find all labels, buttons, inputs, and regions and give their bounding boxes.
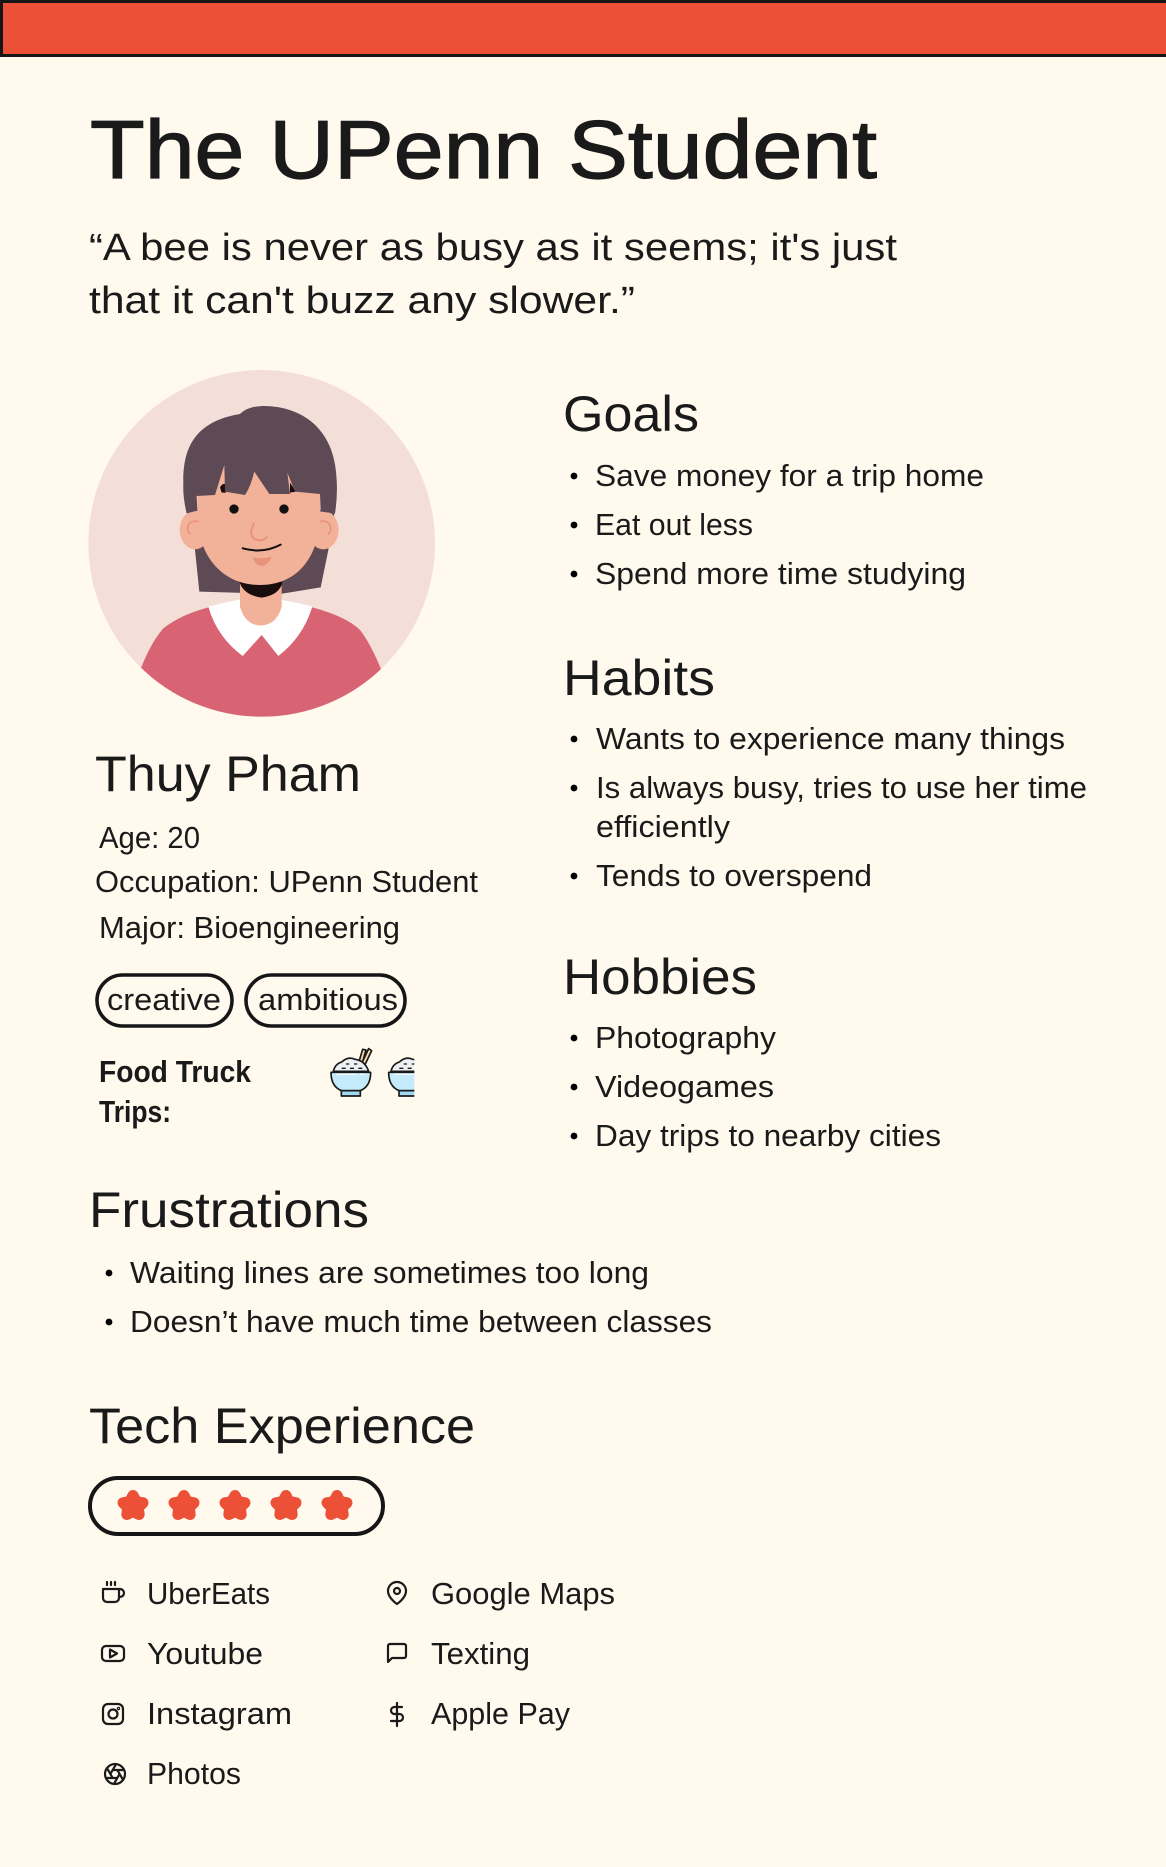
- tag: creative: creative: [107, 982, 221, 1017]
- heading: hobbies: Hobbies: [563, 949, 757, 1005]
- panel: frustrations: [89, 1182, 712, 1339]
- hobbies list: Day trips to nearby cities: [595, 1118, 941, 1153]
- frustrations list: Waiting lines are sometimes too long: [130, 1255, 649, 1290]
- app: UberEats: UberEats: [147, 1576, 270, 1611]
- personal details: Occupation: UPenn Student: [95, 864, 478, 899]
- habits list: [571, 721, 1087, 893]
- heading: habits: Habits: [563, 650, 715, 706]
- bowl 1: [331, 1049, 372, 1096]
- frustrations list: Doesn’t have much time between classes: [130, 1304, 712, 1339]
- hobbies list: [571, 1020, 941, 1153]
- ears: [180, 511, 339, 549]
- hobbies list: Videogames: [595, 1069, 774, 1104]
- personal details: Age: 20: [99, 820, 200, 855]
- quote: that it can't buzz any slower.”: [89, 280, 635, 322]
- heading: goals: Goals: [563, 386, 699, 442]
- face: [197, 463, 320, 585]
- goals list: Eat out less: [595, 507, 753, 542]
- app: Photos: [105, 1756, 241, 1791]
- ear detail: [188, 521, 331, 534]
- goals list: Save money for a trip home: [595, 458, 984, 493]
- brow bits: [220, 483, 296, 493]
- personal details: [95, 820, 478, 945]
- app: Google Maps: Google Maps: [431, 1576, 615, 1611]
- heading: tech experience: Tech Experience: [89, 1398, 475, 1454]
- nose: [251, 523, 267, 540]
- habits list: Tends to overspend: [596, 858, 872, 893]
- personal details: Major: Bioengineering: [99, 910, 400, 945]
- collar: [208, 599, 312, 656]
- sweater: [138, 607, 383, 723]
- panel: habits: [563, 650, 1087, 893]
- hobbies list: Photography: [595, 1020, 776, 1055]
- hair front: [183, 406, 337, 513]
- goals list: [571, 458, 984, 591]
- panel: goals: [563, 386, 984, 591]
- heading: frustrations: Frustrations: [89, 1182, 369, 1238]
- habits list: efficiently: [596, 809, 731, 844]
- icons: rice bowls: [331, 1049, 428, 1096]
- header bar: [2, 2, 1166, 56]
- hair back: [187, 510, 335, 594]
- habits list: Wants to experience many things: [596, 721, 1065, 756]
- frustrations list: [106, 1255, 712, 1339]
- app: Texting: Texting: [431, 1636, 530, 1671]
- food truck trips label: [99, 1054, 252, 1129]
- app: Apple Pay: Apple Pay: [431, 1696, 570, 1731]
- rating: five stars: [90, 1478, 383, 1534]
- quote: [89, 227, 897, 322]
- food truck trips label: Trips:: [99, 1094, 171, 1129]
- neck: [240, 580, 282, 626]
- habits list: Is always busy, tries to use her time: [596, 770, 1087, 805]
- goals list: Spend more time studying: [595, 556, 966, 591]
- bowl 2: [388, 1057, 414, 1097]
- title: The UPenn Student: [90, 103, 877, 196]
- panel: hobbies: [563, 949, 941, 1153]
- app: Texting: [388, 1636, 530, 1671]
- avatar portrait: [88, 370, 435, 723]
- tag: ambitious: [246, 975, 405, 1026]
- name: Thuy Pham: [95, 746, 361, 802]
- mouth: [243, 545, 281, 550]
- app: Youtube: Youtube: [147, 1636, 263, 1671]
- app: Instagram: Instagram: [147, 1696, 292, 1731]
- neck shadow: [239, 582, 283, 598]
- eyes: [229, 504, 289, 514]
- app: Youtube: [102, 1636, 263, 1671]
- food truck trips label: Food Truck: [99, 1054, 252, 1089]
- quote: “A bee is never as busy as it seems; it's just: [89, 227, 897, 269]
- tag: ambitious: ambitious: [258, 982, 398, 1017]
- app: Photos: Photos: [147, 1756, 241, 1791]
- tag: creative: [97, 975, 232, 1026]
- lip: [253, 557, 272, 566]
